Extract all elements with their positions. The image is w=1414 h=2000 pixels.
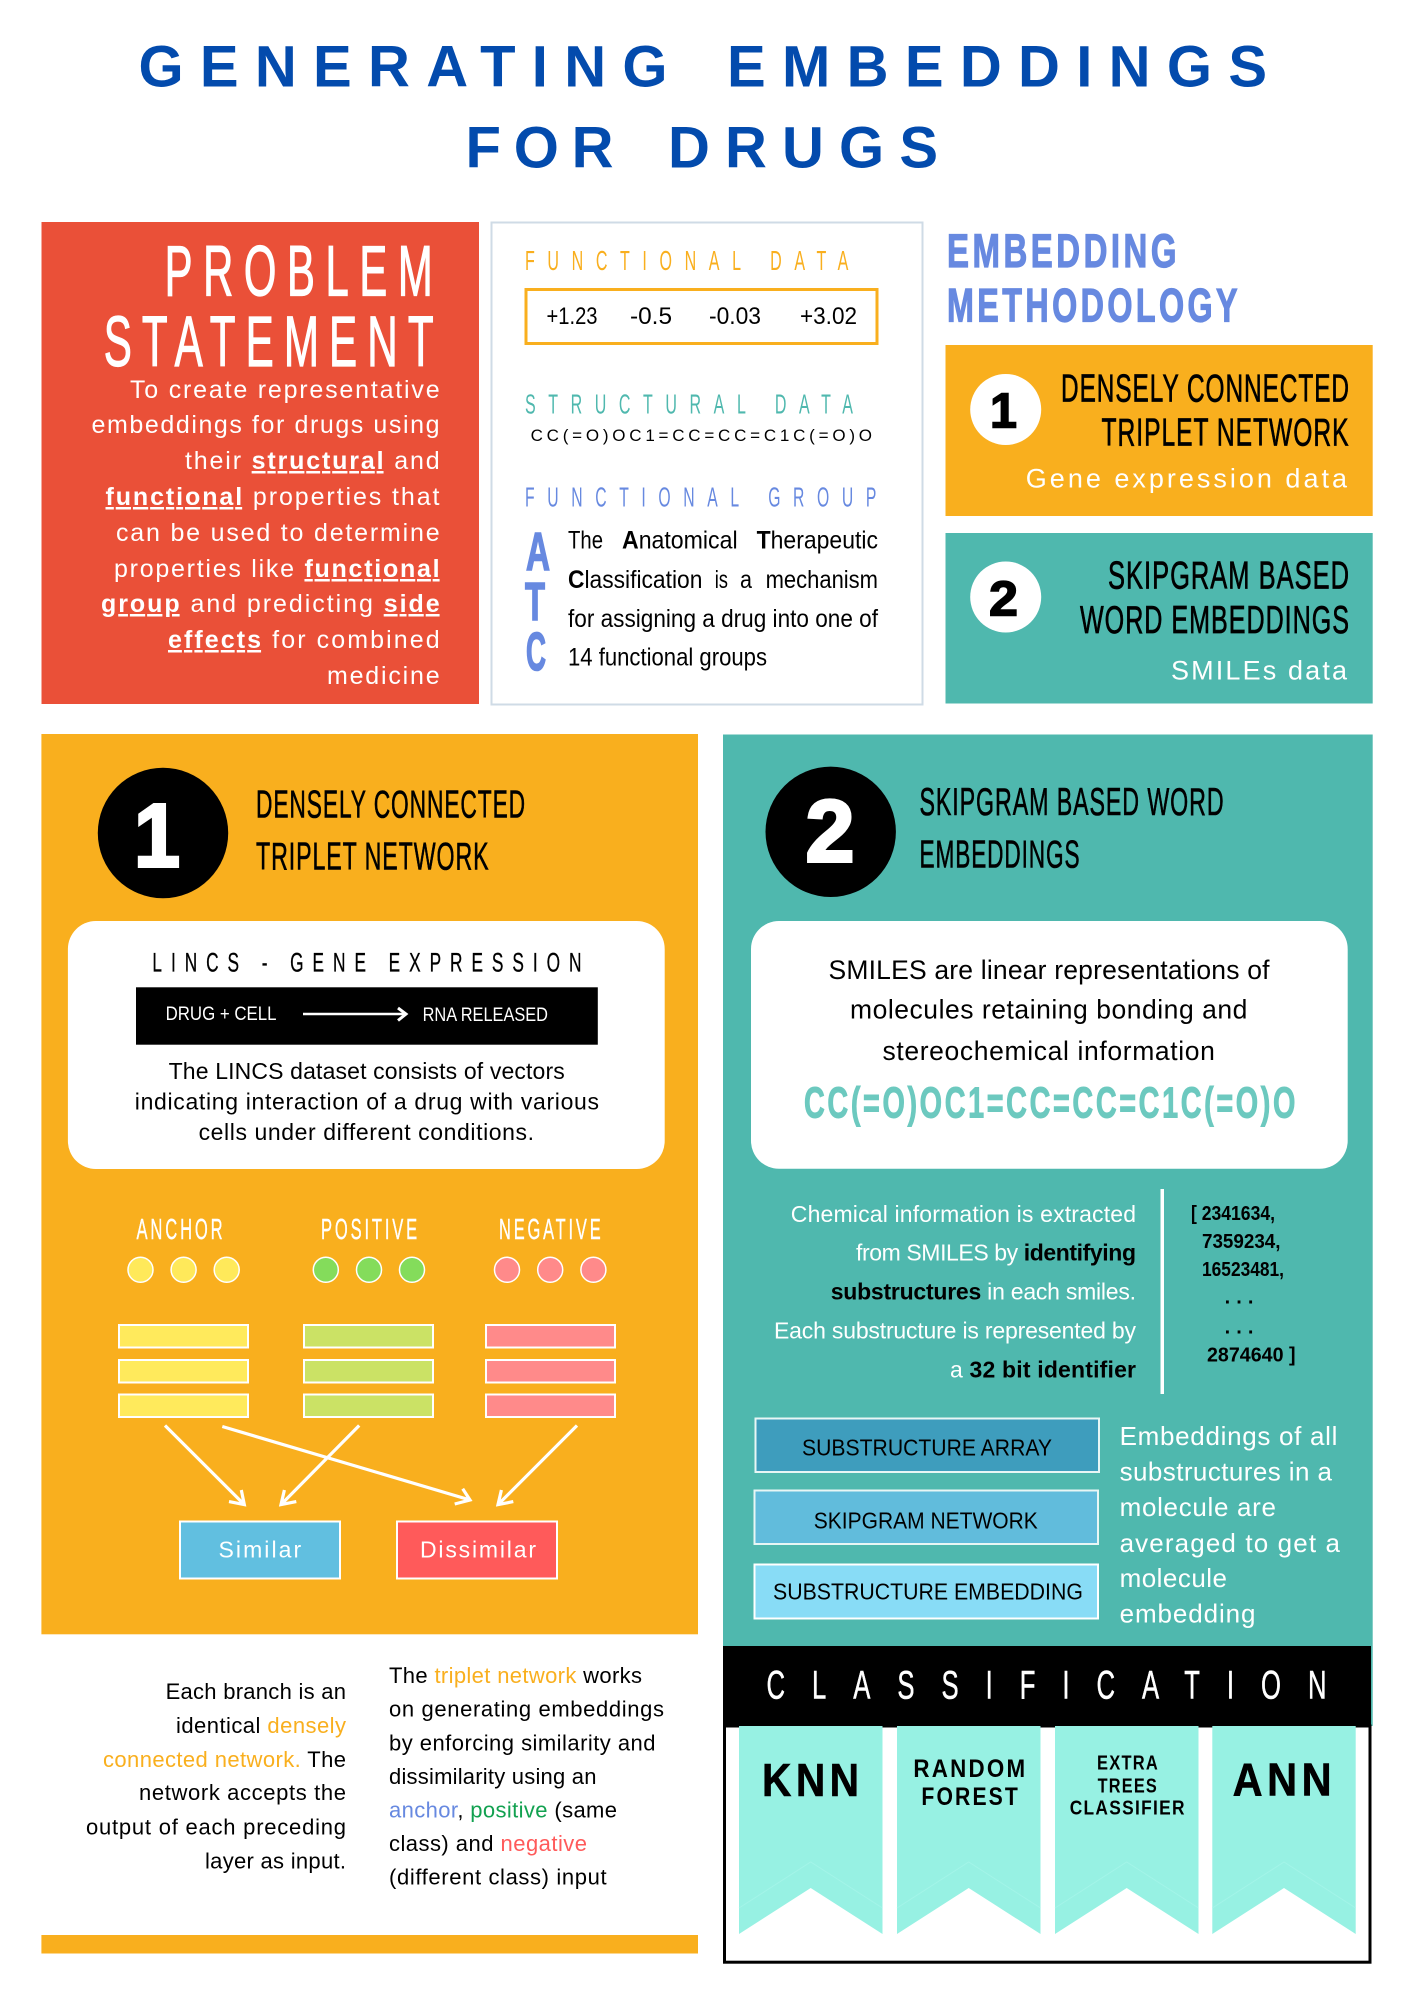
text: LINCS description: cells under different conditions. [199, 1119, 534, 1145]
banner: extra trees classifier [1055, 1726, 1198, 1934]
heading: LINCS: LINCS - GENE EXPRESSION [152, 948, 590, 978]
text: identifier list: . . . [1225, 1287, 1253, 1309]
heading: structural data: STRUCTURAL DATA [525, 388, 866, 420]
labels: anchor positive negative [136, 1214, 604, 1246]
text: SMILES description [828, 955, 1270, 1066]
icon: number 1: 1 [990, 384, 1017, 438]
heading: functional data: FUNCTIONAL DATA [525, 245, 861, 276]
text: embedding averaging [1120, 1421, 1341, 1629]
heading: functional group: FUNCTIONAL GROUP [525, 482, 889, 512]
text: ATC description: is [715, 566, 728, 594]
icon: number 1 [970, 374, 1041, 445]
text: substructure description: Each substructure is represented by [774, 1318, 1136, 1344]
icon: ATC letters: T [525, 572, 545, 632]
panel: densely connected triplet network [41, 734, 698, 1634]
text: embedding averaging: averaged to get a [1120, 1528, 1341, 1558]
text: identifier list [1191, 1203, 1296, 1367]
text: branch description: output of each preceding [86, 1814, 346, 1839]
card: LINCS gene expression [68, 921, 665, 1169]
box: similar: Similar [218, 1536, 302, 1562]
text: triplet network description: by enforcing similarity and [389, 1730, 656, 1755]
text: problem description: properties like functional [114, 555, 440, 583]
text: ATC description: Classification [568, 566, 702, 594]
text: ATC description: for assigning a drug into one of [568, 605, 878, 633]
heading: problem statement: PROBLEM [165, 233, 443, 312]
text: identifier list: 2874640 ] [1207, 1345, 1296, 1367]
input dots [128, 1257, 606, 1282]
panel: method 1 summary [946, 345, 1373, 516]
divider [1160, 1189, 1164, 1394]
text: problem description: their structural and [185, 447, 440, 475]
text: triplet network description: (different class) input [389, 1865, 607, 1890]
text: SMILES description: stereochemical information [882, 1036, 1215, 1066]
text: embedding averaging: Embeddings of all [1120, 1421, 1337, 1451]
heading: section 1: DENSELY CONNECTED [256, 783, 526, 826]
banner: extra trees classifier: CLASSIFIER [1070, 1798, 1186, 1820]
box: dissimilar [397, 1522, 557, 1578]
text: problem description: embeddings for drugs using [92, 411, 440, 439]
text: ATC description: Therapeutic [757, 526, 878, 554]
text: problem description: effects for combined [168, 626, 440, 654]
heading: section 1 [256, 783, 526, 878]
text: ATC description [568, 526, 878, 672]
text: problem description: functional properties that [106, 483, 440, 511]
text: problem description: To create representative [130, 376, 440, 404]
banner: ANN: ANN [1233, 1753, 1336, 1805]
icon: number 2 badge [766, 767, 896, 897]
box: skipgram network: SKIPGRAM NETWORK [814, 1508, 1038, 1534]
text: triplet network description: class) and negative [389, 1831, 587, 1856]
icon: ATC letters [525, 522, 550, 682]
banner: extra trees classifier: EXTRA [1097, 1752, 1159, 1774]
arrows to similar and dissimilar [165, 1426, 577, 1505]
banner: ANN [1212, 1726, 1356, 1934]
text: branch description: network accepts the [139, 1780, 346, 1805]
text: smiles data: SMILEs data [1171, 656, 1348, 686]
heading: classification [723, 1646, 1371, 1726]
heading: skipgram based word embeddings [1080, 554, 1350, 642]
card: SMILES definition [751, 921, 1348, 1169]
panel: problem statement [42, 222, 479, 704]
text: problem description: can be used to determine [116, 519, 440, 547]
text: branch description: Each branch is an [166, 1679, 346, 1704]
heading: problem statement: STATEMENT [104, 303, 444, 382]
text: LINCS description: The LINCS dataset consists of vectors [169, 1058, 565, 1084]
text: substructure description: Chemical information is extracted [791, 1201, 1136, 1227]
box: substructure array [756, 1418, 1099, 1472]
title: GENERATING [138, 35, 668, 100]
text: triplet network description: on generating embeddings [389, 1696, 664, 1722]
text: branch description: connected network. The [103, 1747, 346, 1772]
title: FOR [466, 116, 614, 181]
box: substructure array: SUBSTRUCTURE ARRAY [802, 1434, 1052, 1460]
title [138, 35, 1267, 181]
text: identifier list: 16523481, [1202, 1259, 1284, 1281]
text: triplet network description: dissimilarity using an [389, 1764, 596, 1789]
banner: KNN: KNN [762, 1754, 864, 1806]
functional data values box [526, 290, 877, 344]
text: substructure description: a 32 bit identifier [950, 1356, 1136, 1382]
banner: drug plus cell to RNA released: RNA RELEASED [423, 1005, 548, 1026]
heading: embedding methodology: EMBEDDING [947, 224, 1180, 277]
icon: ATC letters: C [526, 622, 546, 682]
text: identifier list: . . . [1225, 1317, 1253, 1339]
text: gene expression data: Gene expression data [1026, 464, 1348, 494]
box: skipgram network [754, 1490, 1098, 1544]
text: ATC description: The [568, 526, 603, 554]
text: identifier list: [ 2341634, [1191, 1203, 1275, 1225]
text: substructure description: substructures in each smiles. [831, 1279, 1136, 1305]
text: embedding averaging: molecule are [1120, 1492, 1276, 1522]
title: EMBEDDINGS [727, 35, 1267, 100]
text: embedding averaging: embedding [1120, 1599, 1256, 1629]
text: triplet network description: The triplet network works [389, 1663, 642, 1688]
footer bar [41, 1935, 698, 1954]
text: triplet network description: anchor, positive (same [389, 1798, 617, 1822]
text: embedding averaging: substructures in a [1120, 1456, 1333, 1486]
text: problem description [92, 376, 440, 690]
panel: method 2 summary [946, 533, 1373, 704]
functional data values box: +3.02 [800, 303, 857, 330]
text: triplet network description [389, 1663, 664, 1890]
structural data string: CC(=O)OC1=CC=CC=C1C(=O)O [531, 426, 872, 445]
text: branch description [86, 1679, 346, 1873]
text: substructure description [774, 1201, 1136, 1382]
banner: extra trees classifier: TREES [1098, 1775, 1158, 1797]
heading: embedding methodology [947, 224, 1241, 332]
text: problem description: medicine [327, 662, 440, 690]
banner: KNN [739, 1726, 882, 1934]
box: substructure embedding [754, 1564, 1098, 1618]
icon: number 1 badge: 1 [134, 787, 180, 887]
text: ATC description: a [740, 566, 752, 594]
labels: anchor positive negative: NEGATIVE [499, 1214, 604, 1246]
heading: embedding methodology: METHODOLOGY [947, 279, 1241, 332]
panel: classification [723, 1646, 1371, 1962]
panel: skipgram based word embeddings [723, 734, 1373, 1726]
functional data values box: -0.5 [630, 303, 672, 330]
network layer bars [119, 1325, 615, 1417]
text: substructure description: from SMILES by identifying [856, 1240, 1136, 1266]
labels: anchor positive negative: POSITIVE [321, 1214, 420, 1246]
heading: section 1: TRIPLET NETWORK [256, 835, 490, 878]
title: DRUGS [668, 116, 938, 181]
text: branch description: layer as input. [205, 1848, 346, 1873]
banner: drug plus cell to RNA released [136, 987, 598, 1045]
banner: random forest: RANDOM [913, 1755, 1027, 1783]
text: SMILES description: molecules retaining bonding and [850, 995, 1247, 1025]
functional data values box: -0.03 [709, 303, 761, 330]
icon: number 2: 2 [989, 573, 1018, 627]
panel: data types [492, 222, 922, 704]
icon: ATC letters: A [526, 522, 550, 582]
labels: anchor positive negative: ANCHOR [136, 1214, 226, 1246]
icon: number 1 badge [98, 768, 228, 898]
text: ATC description: mechanism [766, 566, 878, 594]
heading: section 2 [920, 781, 1224, 876]
text: ATC description: Anatomical [622, 526, 738, 554]
banner: drug plus cell to RNA released: DRUG + CELL [166, 1004, 276, 1025]
heading: section 2: SKIPGRAM BASED WORD [920, 781, 1224, 824]
icon: number 2 badge: 2 [806, 782, 854, 881]
text: ATC description: 14 functional groups [568, 644, 767, 672]
heading: problem statement [104, 233, 444, 382]
box: substructure embedding: SUBSTRUCTURE EMBEDDING [773, 1578, 1083, 1604]
text: identifier list: 7359234, [1202, 1231, 1280, 1253]
text: problem description: group and predicting side [101, 590, 440, 618]
text: embedding averaging: molecule [1120, 1563, 1227, 1593]
text: branch description: identical densely [176, 1713, 346, 1738]
box: dissimilar: Dissimilar [420, 1536, 536, 1562]
text: LINCS description [135, 1058, 599, 1145]
heading: section 2: EMBEDDINGS [920, 834, 1080, 876]
heading: densely connected triplet network [1061, 367, 1350, 454]
text: SMILES description: SMILES are linear representations of [828, 955, 1270, 985]
banner: random forest: FOREST [921, 1783, 1020, 1811]
functional data values box: +1.23 [546, 303, 598, 330]
icon: number 2 [970, 562, 1041, 632]
banner: random forest [897, 1726, 1040, 1934]
box: similar [180, 1522, 340, 1578]
text: LINCS description: indicating interaction of a drug with various [135, 1088, 599, 1114]
